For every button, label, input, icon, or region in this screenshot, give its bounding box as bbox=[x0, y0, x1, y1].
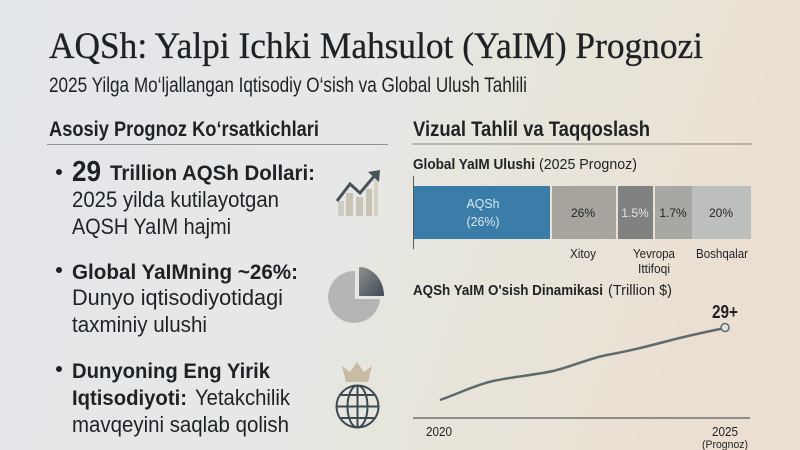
segment: USA: (26%) bbox=[466, 214, 500, 229]
segment: USA: AQSh bbox=[466, 196, 500, 211]
indicator: 29 trillion: 29 bbox=[72, 156, 101, 188]
chart title: growth: AQSh YaIM O'sish Dinamikasi bbox=[413, 282, 603, 299]
segment: other 1.7%: 1.7% bbox=[659, 206, 687, 220]
indicator: global share bbox=[56, 261, 298, 337]
chart title: global share: (2025 Prognoz) bbox=[539, 156, 637, 173]
indicator: 29 trillion bbox=[56, 156, 315, 239]
panel: visual analysis bbox=[412, 118, 752, 450]
indicator: largest economy: Dunyoning Eng Yirik bbox=[72, 360, 270, 383]
bar labels: Yevropa bbox=[633, 247, 675, 261]
indicator: global share: Dunyo iqtisodiyotidagi bbox=[72, 285, 283, 310]
bar labels: Ittifoqi bbox=[638, 262, 670, 276]
indicator: global share: Global YaIMning ~26%: bbox=[72, 261, 298, 284]
bar labels: Xitoy bbox=[570, 247, 597, 261]
line chart: US GDP growth: 29+ bbox=[712, 302, 738, 322]
indicator: largest economy: mavqeyini saqlab qolish bbox=[72, 412, 289, 437]
segment: others bbox=[692, 186, 751, 239]
heading: key indicators: Asosiy Prognoz Ko‘rsatkichlari bbox=[49, 118, 319, 141]
subtitle: 2025 Yilga Mo‘ljallangan Iqtisodiy O‘sish va Global Ulush Tahlili bbox=[49, 74, 527, 97]
segment: others: 20% bbox=[709, 206, 733, 220]
indicator: 29 trillion: Trillion AQSh Dollari: bbox=[110, 162, 315, 185]
line chart: US GDP growth: 2025 bbox=[712, 425, 738, 439]
indicator: largest economy: Yetakchilik bbox=[195, 385, 291, 410]
chart title: global share bbox=[413, 156, 637, 173]
segment: USA bbox=[414, 186, 550, 239]
line chart: US GDP growth: 2020 bbox=[426, 425, 452, 439]
segment: EU: 1.5% bbox=[621, 206, 649, 220]
panel: key indicators bbox=[47, 118, 388, 437]
indicator: 29 trillion: AQSH YaIM hajmi bbox=[72, 214, 231, 239]
segment: EU bbox=[618, 186, 653, 239]
segment: other 1.7% bbox=[655, 186, 692, 239]
chart title: global share: Global YaIM Ulushi bbox=[413, 156, 535, 173]
indicator: global share: taxminiy ulushi bbox=[72, 312, 207, 337]
segment: China bbox=[552, 186, 616, 239]
icon: growth chart bbox=[337, 170, 380, 216]
segment: China: 26% bbox=[571, 206, 595, 220]
indicator: largest economy: Iqtisodiyoti: bbox=[72, 387, 187, 410]
bar labels bbox=[570, 247, 748, 276]
title: AQSh: Yalpi Ichki Mahsulot (YaIM) Prognozi bbox=[49, 26, 703, 67]
bar labels: Boshqalar bbox=[696, 247, 748, 261]
indicator: largest economy bbox=[56, 360, 291, 437]
chart title: growth: (Trillion $) bbox=[608, 282, 672, 299]
line chart: US GDP growth bbox=[413, 302, 750, 450]
icon: pie chart bbox=[328, 267, 384, 323]
icon: crown and globe bbox=[336, 362, 379, 428]
stacked bar chart: global GDP share bbox=[414, 176, 751, 276]
indicator: 29 trillion: 2025 yilda kutilayotgan bbox=[72, 187, 279, 212]
heading: visual analysis: Vizual Tahlil va Taqqoslash bbox=[413, 118, 650, 141]
